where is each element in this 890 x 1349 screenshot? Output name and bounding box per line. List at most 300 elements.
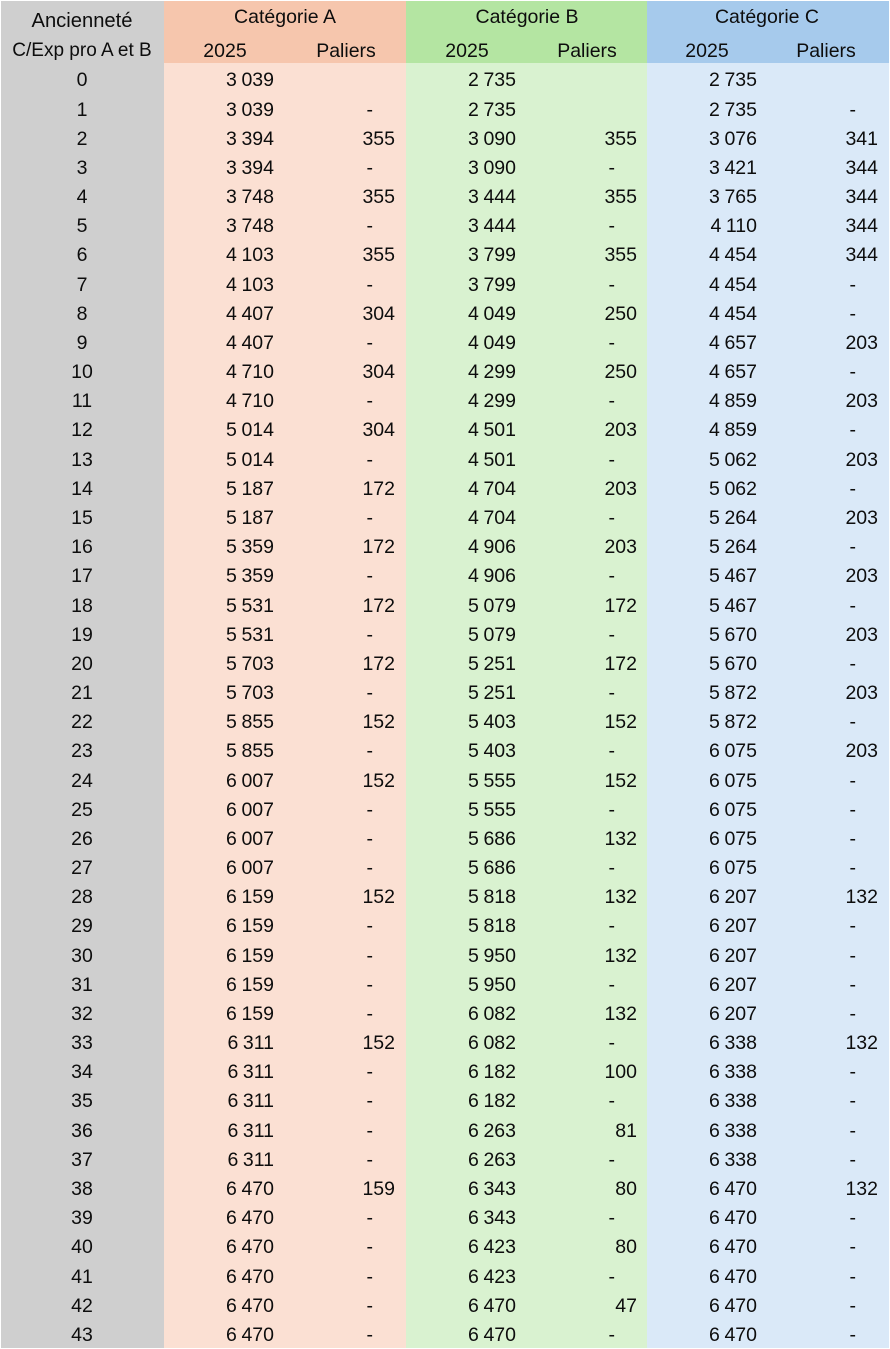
row 8: 304 [362,303,395,325]
heading: category B steps: Paliers [557,40,617,62]
row 41: - [366,1266,373,1288]
row 33: 152 [362,1032,395,1054]
row 19: 19 [71,624,93,646]
row 4: 4 [77,186,87,208]
row 43: - [608,1324,615,1346]
row 9: - [366,332,373,354]
row 29: 29 [71,915,93,937]
row 12: 203 [604,419,637,441]
row 8: 4 407 [226,303,274,325]
row 28: 6 159 [226,886,274,908]
row 29 [71,915,856,937]
row 23: 6 075 [709,740,757,762]
row 32: - [366,1003,373,1025]
row 35: - [608,1090,615,1112]
row 43: - [366,1324,373,1346]
row 40: 40 [71,1236,93,1258]
row 8: - [850,303,856,325]
row 37 [71,1149,856,1171]
row 19 [71,624,878,646]
row 43: 43 [71,1324,93,1346]
row 15: 4 704 [468,507,516,529]
row 2: 3 076 [709,128,757,150]
row 1: 1 [77,99,87,121]
row 20: 172 [362,653,395,675]
row 8: 4 049 [468,303,516,325]
row 4: 3 444 [468,186,516,208]
row 22: 5 403 [468,711,516,733]
row 16: 4 906 [468,536,516,558]
row 23: 5 855 [226,740,274,762]
row 41: 6 470 [226,1266,274,1288]
row 0: 3 039 [226,69,274,91]
row 13: 5 014 [226,449,274,471]
row 27 [71,857,856,879]
heading: category A: Catégorie A [234,6,336,28]
row 41: 41 [71,1266,93,1288]
row 30: 132 [604,945,637,967]
row 10: 304 [362,361,395,383]
row 11: 4 710 [226,390,274,412]
row 9: 4 657 [709,332,757,354]
row 3 [77,157,878,179]
row 43: 6 470 [226,1324,274,1346]
row 38: 38 [71,1178,93,1200]
row 14: 5 062 [709,478,757,500]
row 21: 5 703 [226,682,274,704]
row 39: - [850,1207,856,1229]
row 1: - [366,99,373,121]
row 39: 6 343 [468,1207,516,1229]
row 36: 6 311 [227,1120,274,1142]
row 16 [71,536,856,558]
row 36 [71,1120,856,1142]
row 4: 355 [604,186,637,208]
row 24 [71,770,856,792]
row 19: - [366,624,373,646]
row 43: 6 470 [709,1324,757,1346]
row 37: - [850,1149,856,1171]
row 2 [77,128,878,150]
row 21: 5 872 [709,682,757,704]
row 11: 4 299 [468,390,516,412]
row 39: 6 470 [226,1207,274,1229]
row 17: - [608,565,615,587]
row 30: - [850,945,856,967]
panel: category C header [647,1,889,63]
heading: category A steps: Paliers [316,40,376,62]
row 6: 4 454 [709,244,757,266]
row 36: 6 338 [709,1120,757,1142]
row 17: 4 906 [468,565,516,587]
row 41: - [608,1266,615,1288]
row 4: 3 765 [709,186,757,208]
row 20: - [850,653,856,675]
row 5: 344 [845,215,878,237]
panel: category B header [406,1,647,63]
row 32: 32 [71,1003,93,1025]
row 11: 4 859 [709,390,757,412]
row 11: - [608,390,615,412]
row 42: - [850,1295,856,1317]
row 23: 203 [845,740,878,762]
row 30: 5 950 [468,945,516,967]
row 38 [71,1178,878,1200]
row 34: 34 [71,1061,93,1083]
row 39: - [366,1207,373,1229]
row 21 [71,682,878,704]
row 21: 21 [71,682,93,704]
row 31: - [608,974,615,996]
row 41: - [850,1266,856,1288]
row 33: 132 [845,1032,878,1054]
row 19: 5 670 [709,624,757,646]
panel: category A header [164,1,406,63]
row 42: 47 [615,1295,637,1317]
row 18: 172 [362,595,395,617]
row 2: 355 [604,128,637,150]
row 13: - [608,449,615,471]
row 36: - [366,1120,373,1142]
row 2: 341 [845,128,878,150]
row 37: 6 311 [227,1149,274,1171]
row 20: 5 703 [226,653,274,675]
row 19: 5 079 [468,624,516,646]
row 40: 6 470 [709,1236,757,1258]
row 28: 6 207 [709,886,757,908]
row 29: 6 159 [226,915,274,937]
row 33 [71,1032,878,1054]
row 32: 6 159 [226,1003,274,1025]
row 6: 344 [845,244,878,266]
row 40: - [366,1236,373,1258]
row 7: - [366,274,373,296]
row 38: 6 470 [226,1178,274,1200]
row 38: 6 470 [709,1178,757,1200]
heading: category C: Catégorie C [715,6,819,28]
row 15: - [608,507,615,529]
row 32: 6 207 [709,1003,757,1025]
row 39: 39 [71,1207,93,1229]
row 24: 152 [362,770,395,792]
heading: professional experience: C/Exp pro A et B [12,40,152,61]
row 22: 5 872 [709,711,757,733]
row 26: 132 [604,828,637,850]
row 12: - [850,419,856,441]
row 26 [71,828,856,850]
row 40: 6 423 [468,1236,516,1258]
row 16: 5 359 [226,536,274,558]
row 30: 6 159 [226,945,274,967]
row 4: 355 [362,186,395,208]
row 10: 4 299 [468,361,516,383]
row 7: - [608,274,615,296]
row 42: 6 470 [468,1295,516,1317]
row 4 [77,186,878,208]
row 26: 5 686 [468,828,516,850]
row 26: 6 075 [709,828,757,850]
row 18: 18 [71,595,93,617]
row 36: - [850,1120,856,1142]
row 27: - [608,857,615,879]
row 34: 6 311 [227,1061,274,1083]
row 35: - [850,1090,856,1112]
row 34: - [850,1061,856,1083]
row 11: - [366,390,373,412]
row 30: 30 [71,945,93,967]
row 41: 6 470 [709,1266,757,1288]
row 42: 6 470 [709,1295,757,1317]
row 20: 172 [604,653,637,675]
row 13 [71,449,878,471]
heading: category B: Catégorie B [476,6,578,28]
row 22: 152 [604,711,637,733]
row 13: 203 [845,449,878,471]
row 16: 172 [362,536,395,558]
row 33: 6 338 [709,1032,757,1054]
row 3: - [608,157,615,179]
row 12: 12 [71,419,93,441]
row 28: 132 [604,886,637,908]
row 28: 152 [362,886,395,908]
row 6: 6 [77,244,87,266]
row 28: 5 818 [468,886,516,908]
row 34: 100 [604,1061,637,1083]
row 21: - [366,682,373,704]
row 30: - [366,945,373,967]
row 35: 35 [71,1090,93,1112]
row 42 [0,1294,890,1318]
row 27: 6 075 [709,857,757,879]
row 12: 304 [362,419,395,441]
row 33: - [608,1032,615,1054]
row 14: 172 [362,478,395,500]
row 15: - [366,507,373,529]
row 16: 16 [71,536,93,558]
panel: category B body [406,63,647,1348]
row 31: 6 159 [226,974,274,996]
row 39: 6 470 [709,1207,757,1229]
row 30: 6 207 [709,945,757,967]
row 29: - [850,915,856,937]
row 6 [77,244,878,266]
row 15: 5 187 [226,507,274,529]
row 5: 3 748 [226,215,274,237]
row 9: - [608,332,615,354]
row 34: 6 182 [468,1061,516,1083]
row 14: 14 [71,478,93,500]
row 25: - [850,799,856,821]
row 14 [71,478,856,500]
row 0 [77,69,757,91]
row 33: 6 311 [227,1032,274,1054]
row 9: 4 407 [226,332,274,354]
row 15: 15 [71,507,93,529]
row 36: 81 [615,1120,637,1142]
row 7: 4 103 [226,274,274,296]
row 13: 13 [71,449,93,471]
row 17: 5 359 [226,565,274,587]
row 35: 6 311 [227,1090,274,1112]
row 36: 36 [71,1120,93,1142]
row 38: 132 [845,1178,878,1200]
row 16: - [850,536,856,558]
row 26: - [850,828,856,850]
row 9: 203 [845,332,878,354]
row 31: 31 [71,974,93,996]
row 22: 22 [71,711,93,733]
row 14: 203 [604,478,637,500]
row 40 [0,1235,890,1259]
row 23: 23 [71,740,93,762]
row 3: 3 421 [709,157,757,179]
row 22: 152 [362,711,395,733]
row 10: 4 710 [226,361,274,383]
panel: seniority column [1,1,164,1348]
row 42: 6 470 [226,1295,274,1317]
row 27: 6 007 [226,857,274,879]
row 24: - [850,770,856,792]
row 21: - [608,682,615,704]
row 38: 159 [362,1178,395,1200]
row 12: 4 501 [468,419,516,441]
row 10: - [850,361,856,383]
row 29: 6 207 [709,915,757,937]
row 27: 27 [71,857,93,879]
row 15 [71,507,878,529]
row 3: 3 [77,157,87,179]
row 25: - [366,799,373,821]
row 6: 355 [604,244,637,266]
row 34: 6 338 [709,1061,757,1083]
row 37: 37 [71,1149,93,1171]
row 33: 33 [71,1032,93,1054]
row 31: - [850,974,856,996]
row 15: 203 [845,507,878,529]
row 1: 2 735 [709,99,757,121]
row 0: 2 735 [709,69,757,91]
row 0: 0 [77,69,87,91]
row 27: 5 686 [468,857,516,879]
row 3: 344 [845,157,878,179]
row 38: 6 343 [468,1178,516,1200]
row 43 [0,1323,890,1347]
row 35 [71,1090,856,1112]
row 7: 3 799 [468,274,516,296]
row 3: - [366,157,373,179]
row 25: 6 075 [709,799,757,821]
row 24: 5 555 [468,770,516,792]
row 1: 2 735 [468,99,516,121]
row 36: 6 263 [468,1120,516,1142]
row 30 [71,945,856,967]
row 27: - [366,857,373,879]
row 18: 172 [604,595,637,617]
row 10: 10 [71,361,93,383]
row 16: 203 [604,536,637,558]
row 31: - [366,974,373,996]
row 24: 152 [604,770,637,792]
row 2: 355 [362,128,395,150]
row 12: 4 859 [709,419,757,441]
row 17: 17 [71,565,93,587]
row 18 [71,595,856,617]
row 5: 3 444 [468,215,516,237]
row 40: - [850,1236,856,1258]
row 29: - [366,915,373,937]
row 14: - [850,478,856,500]
row 10: 250 [604,361,637,383]
row 25: 25 [71,799,93,821]
row 10: 4 657 [709,361,757,383]
row 22 [71,711,856,733]
row 8: 8 [77,303,87,325]
row 14: 4 704 [468,478,516,500]
row 7: - [850,274,856,296]
row 32 [71,1003,856,1025]
row 4: 3 748 [226,186,274,208]
row 7 [77,274,856,296]
row 13: 5 062 [709,449,757,471]
row 31: 6 207 [709,974,757,996]
row 39: - [608,1207,615,1229]
row 20: 20 [71,653,93,675]
row 5: 5 [77,215,87,237]
row 8: 250 [604,303,637,325]
row 5: 4 110 [710,215,757,237]
row 24: 6 075 [709,770,757,792]
row 23: - [608,740,615,762]
row 2: 3 394 [226,128,274,150]
row 29: - [608,915,615,937]
heading: category B 2025: 2025 [445,40,489,62]
row 22: - [850,711,856,733]
row 5: - [608,215,615,237]
row 6: 3 799 [468,244,516,266]
row 37: 6 263 [468,1149,516,1171]
row 13: - [366,449,373,471]
row 35: 6 338 [709,1090,757,1112]
panel: category C body [647,63,889,1348]
row 11: 203 [845,390,878,412]
row 0: 2 735 [468,69,516,91]
row 17: - [366,565,373,587]
row 25 [71,799,856,821]
row 23 [71,740,878,762]
row 15: 5 264 [709,507,757,529]
row 2: 3 090 [468,128,516,150]
row 38: 80 [615,1178,637,1200]
row 8: 4 454 [709,303,757,325]
row 32: - [850,1003,856,1025]
row 16: 5 264 [709,536,757,558]
row 13: 4 501 [468,449,516,471]
row 42: - [366,1295,373,1317]
row 9: 9 [77,332,87,354]
row 3: 3 090 [468,157,516,179]
row 24: 24 [71,770,93,792]
row 12 [71,419,856,441]
row 24: 6 007 [226,770,274,792]
row 41: 6 423 [468,1266,516,1288]
row 34: - [366,1061,373,1083]
row 23: 5 403 [468,740,516,762]
row 37: - [366,1149,373,1171]
row 23: - [366,740,373,762]
row 9: 4 049 [468,332,516,354]
row 17: 5 467 [709,565,757,587]
row 6: 4 103 [226,244,274,266]
